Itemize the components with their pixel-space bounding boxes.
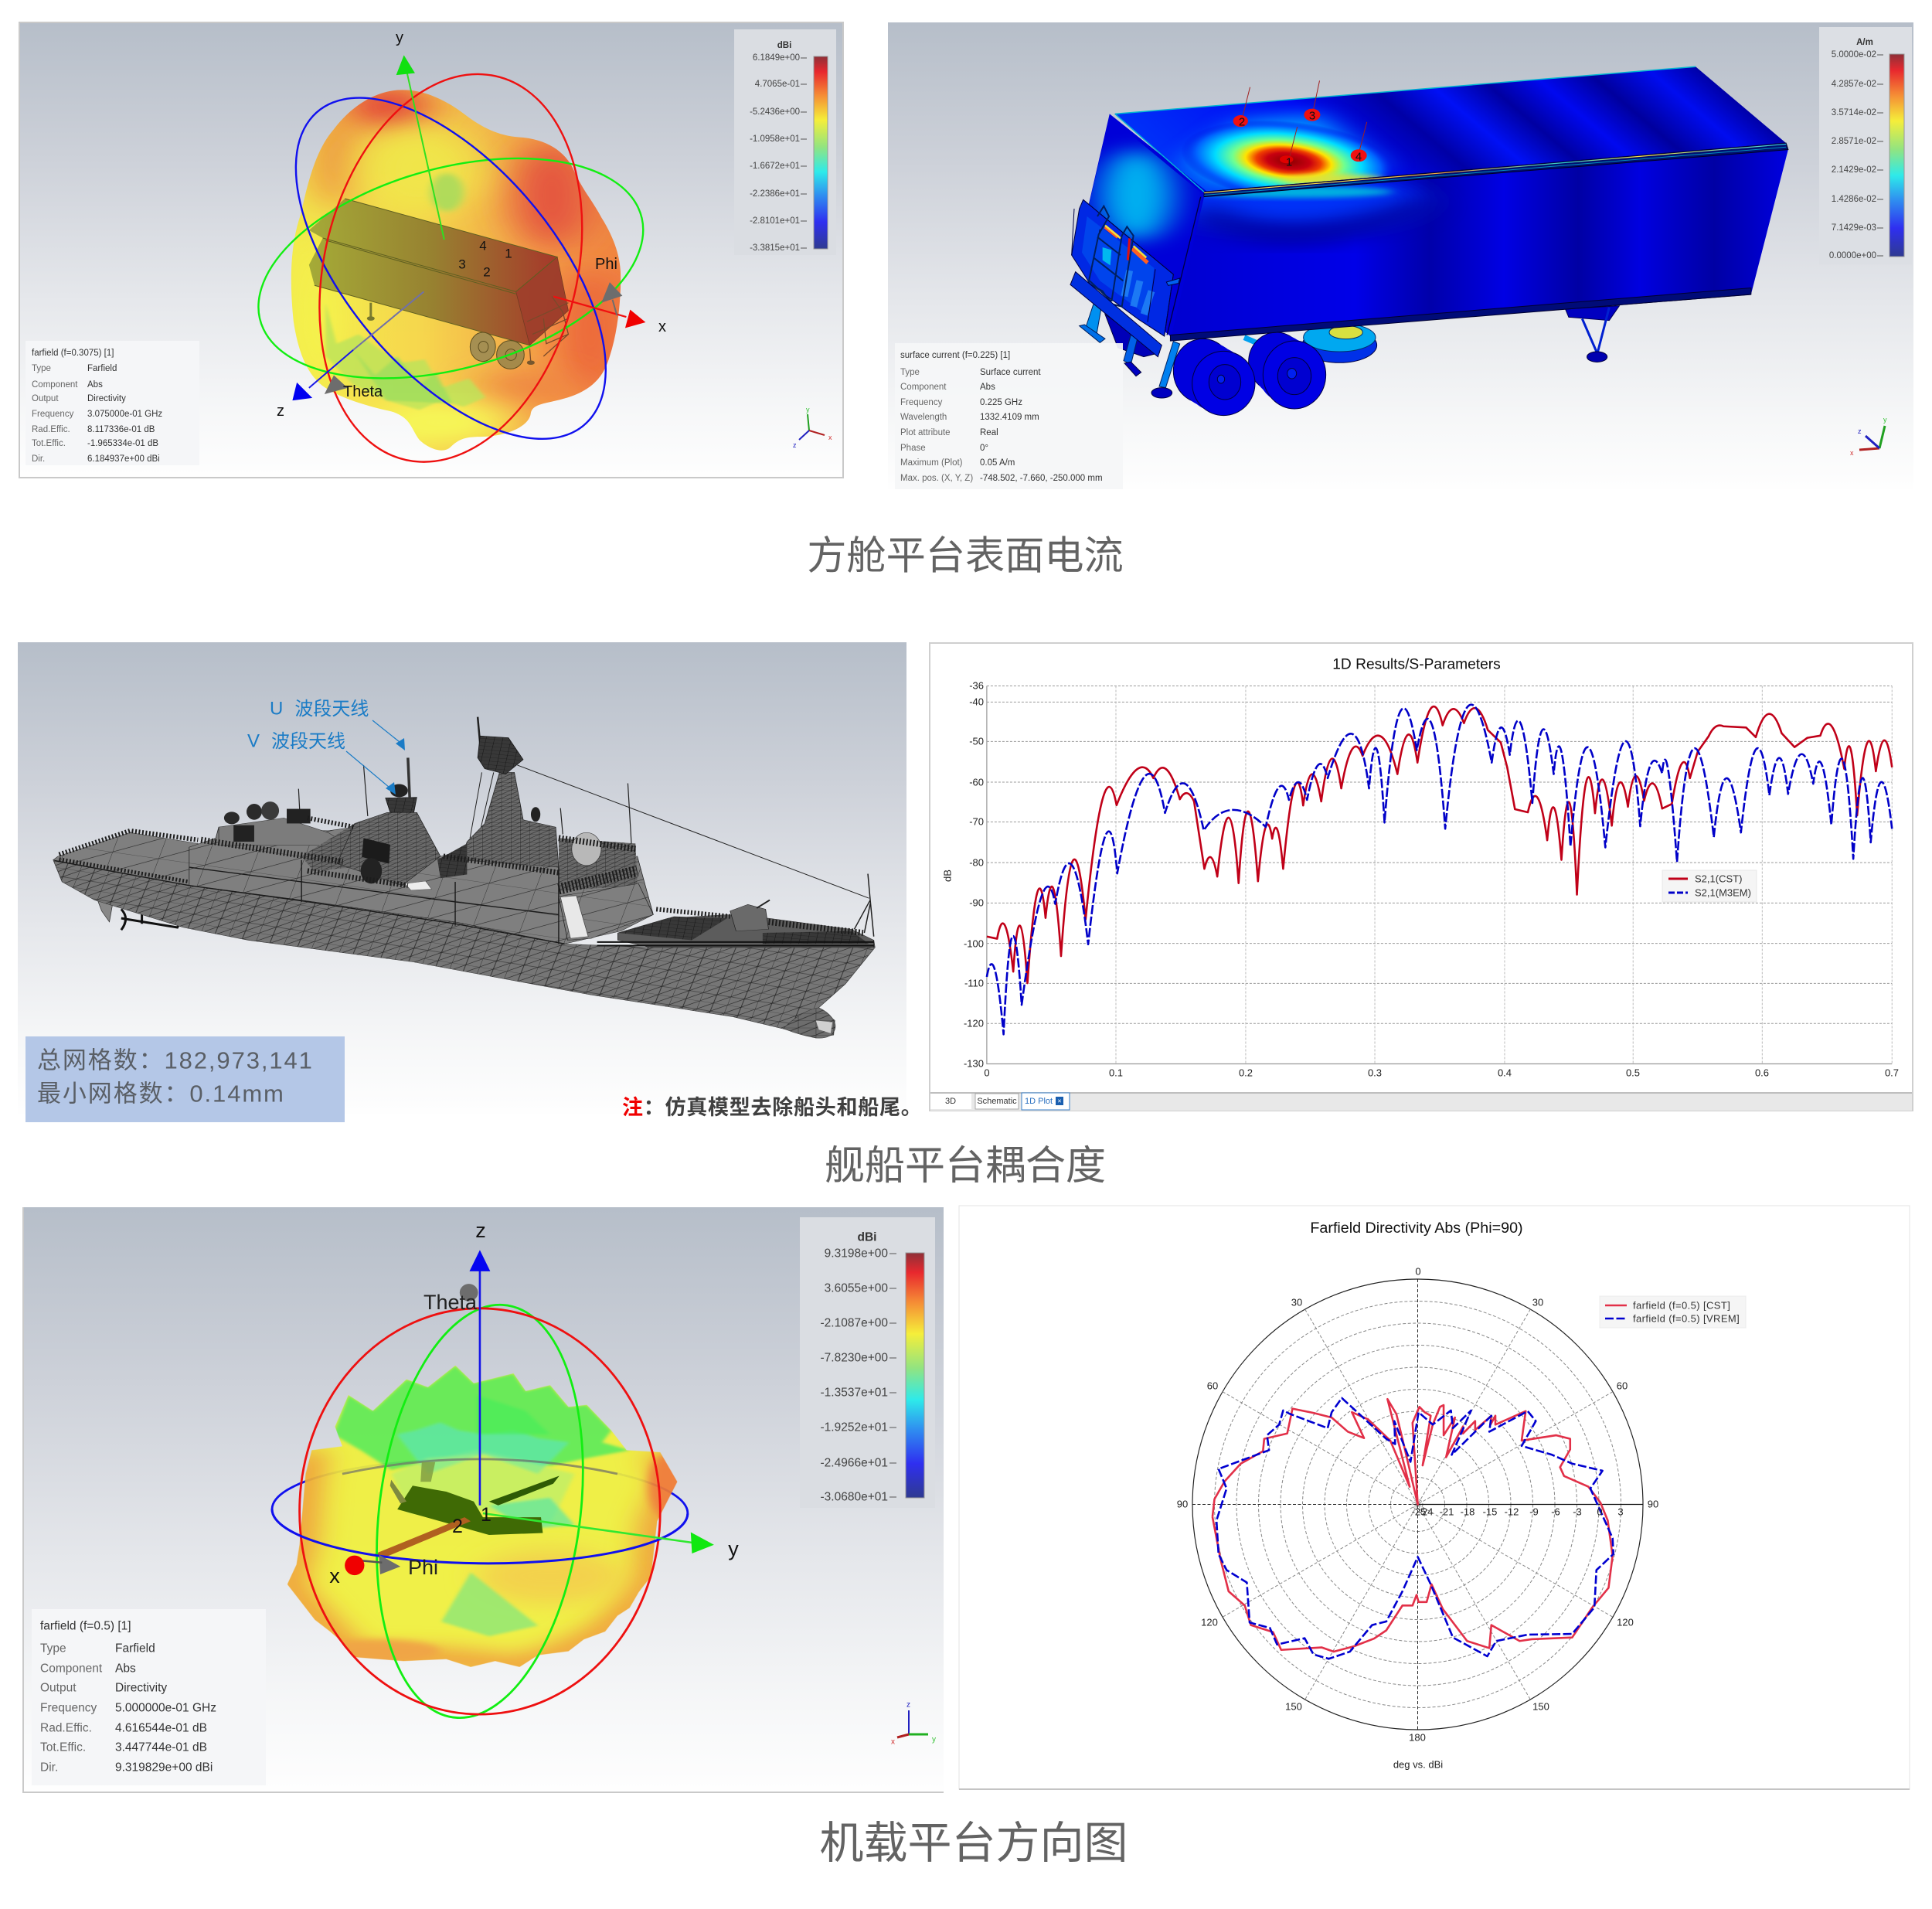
radial scale labels: 3 [1617,1506,1624,1518]
info box: farfield: Abs [87,380,103,390]
axis labels: 4 [479,238,487,254]
info box: farfield: Dir. [32,454,45,464]
info box: farfield: 6.184937e+00 dBi [87,454,160,464]
info box: farfield: Output [32,394,59,403]
axis triad: y [806,406,810,413]
tab bar: 3D [945,1097,956,1106]
chart title: Farfield Directivity Abs (Phi=90) [1310,1220,1523,1237]
info box: farfield: Rad.Effic. [40,1722,92,1734]
axis triad: y [1883,416,1887,424]
axis triad: z [906,1700,910,1710]
info box: farfield: Tot.Effic. [40,1741,86,1754]
y axis labels: -60 [969,776,984,788]
axis triad [891,1700,936,1747]
legend: A/m colour scale: 2.1429e-02 [1832,165,1876,175]
info box: surface current: Surface current [980,368,1041,377]
axis labels: Phi [408,1556,438,1579]
grid [987,686,1892,1063]
tab bar: Schematic [977,1097,1017,1106]
side face [1170,150,1788,340]
deck edges [54,860,565,944]
legend: dBi colour scale: -5.2436e+00 [750,107,800,117]
axis labels: 1 [505,246,512,261]
legend: dBi colour scale: -7.8230e+00 [821,1351,888,1365]
radial scale labels: -15 [1483,1506,1497,1518]
y axis labels: -80 [969,856,984,869]
port labels: 2 [1239,116,1245,128]
angle labels: 150 [1285,1700,1302,1713]
trailer body [309,199,568,369]
info box: surface current: Plot attribute [900,428,951,437]
y axis labels: -100 [964,938,984,949]
legend: A/m colour scale: 0.0000e+00 [1829,251,1876,260]
legend: dBi colour scale: dBi [858,1230,876,1244]
mesh statistics box: 最小网格数：0.14mm [37,1080,285,1107]
rear face [1076,114,1207,340]
main mast tower [461,772,559,867]
polar grid [1192,1279,1643,1730]
legend: A/m colour scale: 1.4286e-02 [1832,195,1876,204]
x axis labels: 0.2 [1239,1067,1253,1079]
axis triad: x [1850,449,1854,457]
title: shelter platform: 方舱平台表面电流 [807,533,1124,578]
axis labels: x [329,1564,340,1587]
angle labels: 120 [1201,1617,1218,1628]
radial scale labels: -6 [1551,1506,1560,1518]
x axis labels: 0 [984,1067,990,1079]
annotation: V band antenna: V 波段天线 [247,731,345,751]
curve: farfield CST [1213,1399,1613,1652]
axis caption: deg vs. dBi [1393,1759,1443,1770]
info box: farfield [32,1609,266,1785]
axis labels: 3 [458,257,466,272]
axis triad: x [891,1737,895,1747]
axis triad: y [932,1736,936,1744]
x axis labels: 0.3 [1368,1067,1382,1079]
info box: surface current: 1332.4109 mm [980,413,1039,422]
legend: dBi colour scale: -2.8101e+01 [750,216,800,226]
curve: farfield VREM [1216,1398,1614,1659]
bridge wing block [559,838,638,891]
radial scale labels: -24 [1419,1506,1433,1518]
info box: surface current: Wavelength [900,413,947,422]
hull [53,860,875,1038]
angle labels: 90 [1648,1498,1658,1510]
info box: farfield: Farfield [87,364,117,373]
angle labels: 120 [1617,1617,1634,1628]
radial scale labels: -3 [1573,1506,1582,1518]
radome and radars [572,832,601,866]
legend: farfield (f=0.5) [VREM] [1633,1312,1740,1325]
legend: A/m colour scale [1819,27,1912,264]
railings [59,818,863,933]
info box: surface current: Abs [980,383,995,392]
legend: dBi colour scale: -2.2386e+01 [750,189,800,199]
info box: farfield: Tot.Effic. [32,439,66,448]
x axis labels: 0.7 [1885,1067,1899,1079]
tab bar: × [1057,1097,1062,1105]
trailer surface current model [1076,66,1788,362]
info box: farfield: Rad.Effic. [32,425,70,434]
legend: A/m colour scale: 7.1429e-03 [1832,223,1876,233]
info box: surface current: Type [900,368,920,377]
radial scale labels: -21 [1440,1506,1454,1518]
info box: surface current: Phase [900,444,926,453]
legend: dBi colour scale [800,1217,935,1508]
legend: dBi colour scale: -2.1087e+00 [821,1317,888,1329]
info box: farfield: Abs [115,1662,136,1676]
axis labels: Theta [423,1291,478,1314]
annotation: V band antenna [247,731,396,795]
x axis labels: 0.6 [1755,1067,1769,1079]
angle labels: 30 [1532,1297,1543,1308]
title: ship platform: 舰船平台耦合度 [825,1144,1106,1189]
x axis labels: 0.4 [1498,1067,1512,1079]
mesh statistics box [26,1036,345,1122]
angle labels: 60 [1617,1380,1628,1391]
info box: farfield: farfield (f=0.3075) [1] [32,349,114,358]
radial scale labels: 0 [1597,1506,1603,1518]
info box: farfield: 9.319829e+00 dBi [115,1761,213,1775]
axis labels [277,29,666,420]
panel: ship mesh model [18,642,923,1122]
info box: farfield: farfield (f=0.5) [1] [40,1620,131,1632]
axis triad: z [793,441,797,449]
axis labels: 2 [483,264,491,280]
wheels, legs and underbody [1080,304,1377,416]
axis triad: x [828,434,832,441]
axes arrows [292,55,645,400]
farfield lobe and trailer [257,56,646,463]
info box: farfield: Frequency [40,1702,97,1714]
x axis labels: 0.1 [1109,1067,1123,1079]
rudder and propeller [97,900,112,922]
info box: surface current [895,343,1123,489]
legend: dBi colour scale: -3.0680e+01 [821,1490,888,1504]
angle labels: 90 [1177,1498,1188,1510]
forward deck [617,914,874,948]
annotation: U band antenna [270,699,405,750]
panel: polar directivity chart [959,1206,1910,1789]
angle labels: 30 [1291,1297,1302,1308]
info box: farfield: Type [40,1642,66,1655]
note: 注：仿真模型去除船头和船尾。 [622,1095,923,1119]
info box: farfield: Type [32,364,51,373]
info box: farfield: Directivity [115,1682,167,1694]
info box: farfield: 4.616544e-01 dB [115,1722,207,1734]
y axis labels: -70 [969,816,984,827]
x axis labels [984,1067,1899,1079]
legend: A/m colour scale: 5.0000e-02 [1832,50,1876,60]
y axis title: dB [941,869,954,882]
legend: dBi colour scale: -1.0958e+01 [750,134,800,144]
y axis labels: -36 [969,680,984,691]
axis triad: z [1858,427,1862,435]
info box: farfield: 3.075000e-01 GHz [87,410,162,419]
info box: farfield: -1.965334e-01 dB [87,439,158,448]
panel: shelter farfield 3D pattern [19,22,843,478]
info box: farfield: Component [40,1662,103,1676]
legend: dBi colour scale: -2.4966e+01 [821,1456,888,1470]
legend: dBi colour scale: -3.3815e+01 [750,243,800,253]
axis triad [793,406,832,449]
forward tower [337,812,440,886]
y axis labels: -90 [969,897,984,909]
info box: farfield: Dir. [40,1761,58,1775]
legend: S2,1(CST) [1695,873,1742,884]
legend: dBi colour scale: -1.9252e+01 [821,1421,888,1434]
title: airborne platform: 机载平台方向图 [819,1819,1128,1868]
axes arrows [345,1250,714,1575]
axis labels: 2 [452,1516,463,1537]
y axis labels: -110 [964,977,984,989]
info box: surface current: Frequency [900,398,943,407]
tab bar [930,1093,1912,1111]
legend: dBi colour scale: 9.3198e+00 [825,1247,888,1260]
info box: farfield: Directivity [87,394,126,403]
legend [1600,1296,1746,1328]
info box: surface current: Maximum (Plot) [900,458,963,468]
port labels: 3 [1309,110,1315,122]
axis labels: 1 [481,1504,492,1526]
info box: surface current: 0.05 A/m [980,458,1015,468]
rear door and ladder [1070,199,1180,357]
y axis labels: -120 [964,1017,984,1029]
aircraft [373,1462,560,1559]
angle labels: 0 [1415,1266,1421,1277]
axis labels [329,1219,739,1587]
info box: farfield [26,341,199,465]
info box: surface current: Max. pos. (X, Y, Z) [900,474,973,483]
gun [730,904,768,931]
y axis labels: -50 [969,736,984,747]
info box: surface current: Real [980,428,998,437]
curve: S2,1 M3EM [987,705,1892,1034]
info box: farfield: Component [32,380,78,390]
port labels: 1 [1286,156,1292,168]
info box: surface current: Component [900,383,947,392]
info box: farfield: 5.000000e-01 GHz [115,1702,216,1714]
radial scale labels [1412,1506,1624,1518]
bulbous bow [784,1008,835,1038]
legend: dBi colour scale [734,29,836,255]
panel: aircraft farfield 3D pattern [23,1207,944,1792]
axis labels: Theta [343,383,383,400]
y axis labels [964,680,984,1070]
legend: dBi colour scale: 6.1849e+00 [753,53,800,63]
angle labels: 150 [1532,1700,1549,1713]
angle labels [1177,1266,1658,1744]
legend: A/m colour scale: 3.5714e-02 [1832,108,1876,117]
axis labels: y [728,1537,739,1560]
legend: A/m colour scale: 2.8571e-02 [1832,137,1876,146]
feed ports [1233,80,1367,163]
chart title: 1D Results/S-Parameters [1332,657,1501,672]
axis labels: Phi [595,256,617,273]
y axis labels: -130 [964,1057,984,1070]
y axis labels: -40 [969,696,984,708]
info box: farfield: Output [40,1682,77,1694]
radial scale labels: -9 [1529,1506,1539,1518]
axis triad [1850,416,1887,457]
farfield lobe, aircraft and rings [270,1250,714,1722]
tab bar: 1D Plot [1025,1097,1053,1106]
info box: surface current: 0° [980,444,988,453]
radial scale labels: -25 [1412,1506,1426,1518]
axis labels: z [277,403,284,420]
rings [270,1300,688,1722]
rings [183,67,719,468]
angle labels: 60 [1207,1380,1218,1391]
info box: farfield: Farfield [115,1642,155,1655]
legend: dBi colour scale: 3.6055e+00 [825,1281,888,1295]
axis labels: x [658,318,666,335]
annotation: U band antenna: U 波段天线 [270,699,369,719]
mesh statistics box: 总网格数：182,973,141 [37,1046,314,1074]
legend: A/m colour scale: 4.2857e-02 [1832,80,1876,89]
radial scale labels: -18 [1461,1506,1475,1518]
radial scale labels: -12 [1505,1506,1519,1518]
legend: dBi colour scale: -1.3537e+01 [821,1387,888,1399]
legend: S2,1(M3EM) [1695,887,1751,898]
info box: farfield: 8.117336e-01 dB [87,425,155,434]
info box: surface current: 0.225 GHz [980,398,1022,407]
curve: S2,1 CST [987,706,1892,983]
port labels: 4 [1355,150,1362,164]
axis labels: z [475,1219,486,1242]
axis labels: y [396,29,403,46]
info box: farfield: 3.447744e-01 dB [115,1741,207,1754]
ship mesh [53,717,875,1038]
legend: dBi colour scale: -1.6672e+01 [750,162,800,171]
main superstructure [189,827,653,944]
aft deck [53,832,198,886]
masts and wires [298,717,874,937]
top face [1115,66,1786,192]
legend: farfield (f=0.5) [CST] [1633,1300,1730,1311]
angle labels: 180 [1409,1731,1426,1744]
info box: surface current: surface current (f=0.225) [1] [900,351,1010,360]
port labels [1239,110,1362,168]
legend: dBi colour scale: dBi [777,41,791,50]
info box: surface current: -748.502, -7.660, -250.000 mm [980,474,1103,483]
x axis labels: 0.5 [1626,1067,1640,1079]
legend: A/m colour scale: A/m [1856,38,1873,47]
panel: S-parameter chart [930,643,1913,1111]
info box: farfield: Frequency [32,410,74,419]
legend: dBi colour scale: 4.7065e-01 [755,80,800,89]
panel: shelter surface current [888,22,1913,489]
legend [1662,870,1757,902]
